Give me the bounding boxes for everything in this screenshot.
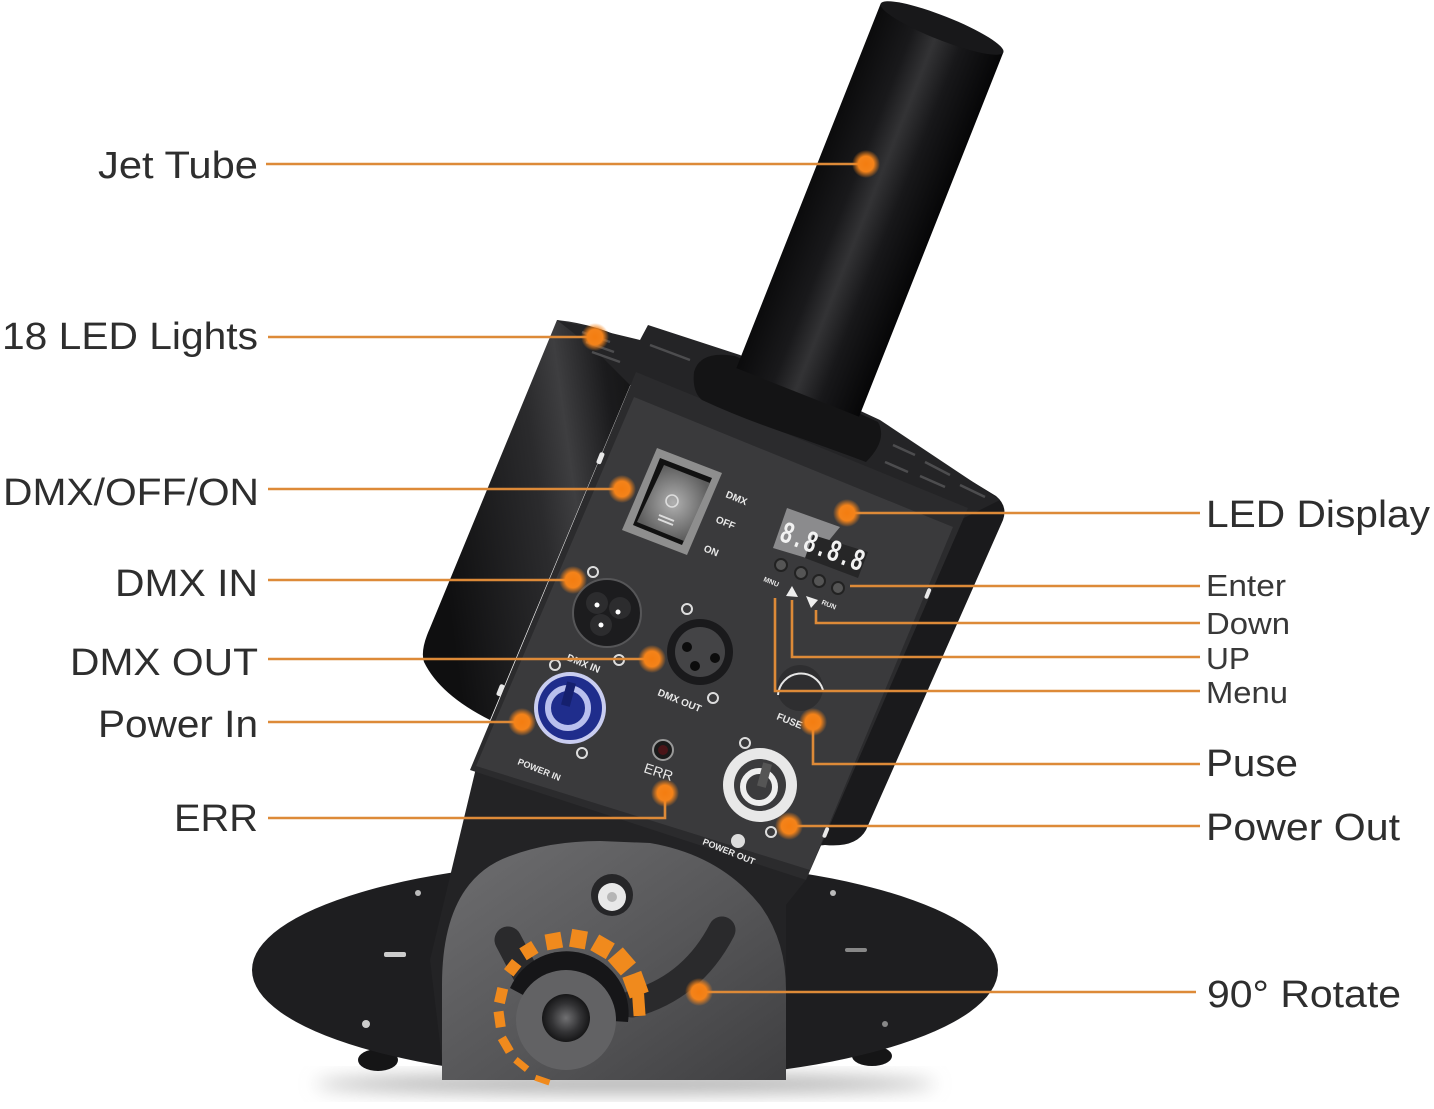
DMX IN connector [565, 567, 641, 676]
callout: Power In: Power In [98, 704, 258, 746]
rotation slot [508, 930, 722, 1022]
menu buttons [775, 559, 844, 594]
button labels: MNU [762, 576, 780, 589]
callout: ERR [174, 779, 679, 840]
jet tube [694, 0, 1008, 462]
top vents [557, 320, 1000, 520]
LED display: 8.8.8.8 [774, 517, 869, 581]
callout: DMX IN [115, 563, 587, 605]
fuse: FUSE [775, 712, 804, 732]
90 degree arc marker [494, 929, 649, 1085]
callout: Down: Down [1206, 606, 1290, 641]
callout: UP [792, 600, 1250, 676]
left LED housing [423, 320, 645, 720]
callout: Down [816, 606, 1290, 641]
callout: Puse [799, 708, 1298, 785]
ERR LED [642, 740, 675, 784]
callout: Power Out: Power Out [1206, 807, 1400, 849]
callout: LED Display: LED Display [1206, 494, 1430, 536]
LED display [773, 508, 869, 581]
callout: ERR: ERR [174, 798, 258, 840]
callout: DMX/OFF/ON [3, 472, 636, 514]
button labels: RUN [820, 599, 837, 612]
switch labels: DMX [724, 490, 749, 508]
button labels [762, 576, 837, 612]
callout: 18 LED Lights [2, 316, 609, 358]
fuse [775, 665, 823, 732]
bracket [430, 768, 806, 1060]
rotation plate [442, 841, 786, 1080]
callout: Power Out [775, 807, 1400, 849]
callout: DMX OUT [70, 642, 666, 684]
callout: Puse: Puse [1206, 743, 1298, 785]
Power Out connector: POWER OUT [701, 837, 757, 867]
Power In connector: POWER IN [516, 757, 562, 783]
Power In connector [516, 660, 606, 783]
callout: Jet Tube [98, 145, 880, 187]
callout: DMX OUT: DMX OUT [70, 642, 258, 684]
DMX OUT connector: DMX OUT [656, 688, 703, 715]
switch labels [702, 490, 749, 559]
callout: DMX IN: DMX IN [115, 563, 258, 605]
callout: Jet Tube: Jet Tube [98, 145, 258, 187]
ERR LED: ERR [642, 760, 675, 784]
right LED housing [780, 424, 1004, 850]
control panel body [470, 372, 968, 880]
switch labels: OFF [714, 515, 737, 532]
rocker switch [622, 448, 722, 555]
DMX IN connector: DMX IN [565, 653, 601, 676]
callout: 90° Rotate [685, 974, 1401, 1016]
base plate [252, 860, 998, 1080]
callout: DMX/OFF/ON: DMX/OFF/ON [3, 472, 259, 514]
machine illustration [252, 0, 1008, 1093]
callout: Menu: Menu [1206, 675, 1288, 710]
callout: UP: UP [1206, 641, 1250, 676]
callout: Power In [98, 704, 536, 746]
callout: Enter: Enter [1206, 568, 1286, 603]
DMX OUT connector [656, 604, 733, 715]
side notches [496, 452, 932, 838]
switch labels: ON [702, 544, 720, 559]
callout: 18 LED Lights: 18 LED Lights [2, 316, 258, 358]
callout: LED Display [833, 494, 1430, 536]
panel face [476, 397, 953, 870]
Power Out connector [701, 738, 797, 867]
callout: Menu [775, 598, 1288, 710]
hub knob [516, 970, 616, 1070]
callout: 90° Rotate: 90° Rotate [1207, 974, 1401, 1016]
